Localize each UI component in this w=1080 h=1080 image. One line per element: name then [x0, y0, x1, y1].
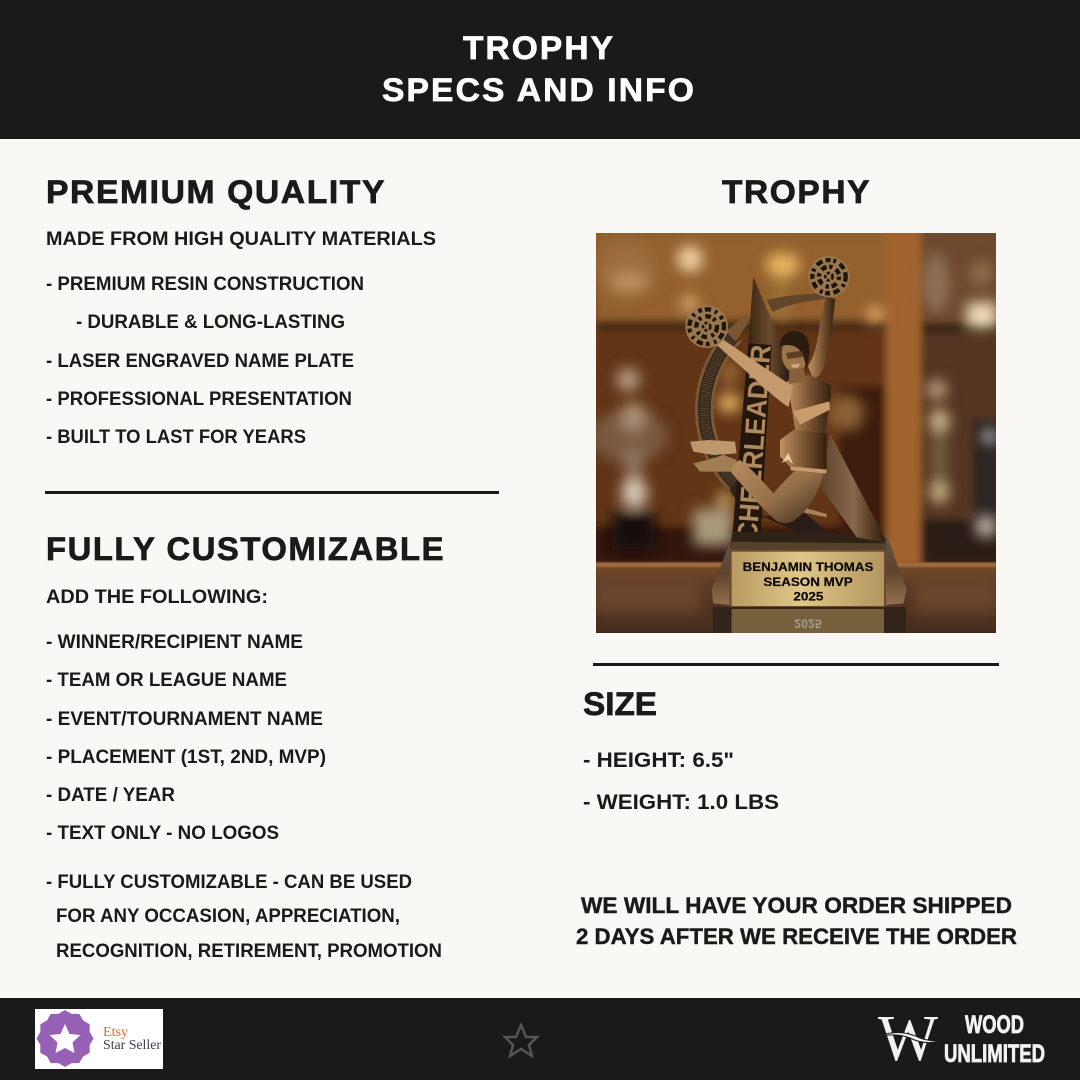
- badge text: [103, 1025, 161, 1053]
- shipping note: WE WILL HAVE YOUR ORDER SHIPPED: [581, 893, 1012, 918]
- torso: [787, 375, 831, 437]
- header band: [0, 0, 1080, 139]
- left arm: [717, 338, 793, 407]
- list: quality features: - PREMIUM RESIN CONSTRUCTION: [46, 273, 364, 295]
- footer band: [0, 998, 1080, 1080]
- heading: premium quality: PREMIUM QUALITY: [46, 174, 386, 210]
- arc ring: [704, 293, 835, 540]
- subheading: add the following: ADD THE FOLLOWING:: [46, 586, 268, 608]
- feet: [690, 440, 737, 455]
- heading: trophy: TROPHY: [722, 174, 871, 210]
- logo wordmark: [944, 1011, 1045, 1068]
- text block: occasions: RECOGNITION, RETIREMENT, PROMOTION: [56, 940, 442, 962]
- list: quality features: - DURABLE & LONG-LASTING: [76, 311, 345, 333]
- logo wordmark: WOOD: [965, 1011, 1024, 1039]
- pom pom right: [808, 256, 850, 297]
- logo mark: W: W: [878, 1002, 939, 1075]
- blurred background shelves and trophies: [596, 226, 1003, 566]
- heading: fully customizable: FULLY CUSTOMIZABLE: [46, 531, 445, 567]
- header title: TROPHY: [463, 30, 615, 66]
- list: customization options: [46, 631, 326, 844]
- text: weight: - WEIGHT: 1.0 LBS: [583, 791, 779, 814]
- trophy figure: [685, 256, 907, 607]
- legs: [727, 460, 823, 523]
- trophy photo: [596, 233, 996, 633]
- list: quality features: - BUILT TO LAST FOR YEARS: [46, 426, 306, 448]
- badge text: Etsy: [103, 1025, 128, 1040]
- icon: outline star: [505, 1025, 537, 1056]
- plate reflection: [713, 607, 906, 633]
- list: customization options: - EVENT/TOURNAMENT NAME: [46, 708, 323, 730]
- banner strip: [732, 343, 772, 543]
- icon: purple badge with star: [36, 1010, 94, 1067]
- list: customization options: - DATE / YEAR: [46, 784, 175, 806]
- list: quality features: - PROFESSIONAL PRESENTATION: [46, 388, 352, 410]
- name plate: 2025: [793, 590, 823, 604]
- name plate: BENJAMIN THOMAS: [743, 560, 873, 574]
- text block: occasions: - FULLY CUSTOMIZABLE - CAN BE USED: [46, 871, 412, 893]
- head: [780, 331, 809, 384]
- logo wordmark: UNLIMITED: [944, 1040, 1045, 1068]
- list: quality features: [46, 273, 364, 448]
- list: customization options: - PLACEMENT (1ST, 2ND, MVP): [46, 746, 326, 768]
- list: quality features: - LASER ENGRAVED NAME PLATE: [46, 350, 354, 372]
- panel: premium quality: [46, 174, 436, 448]
- plate reflection: 2025: [794, 616, 822, 630]
- list: customization options: - TEXT ONLY - NO LOGOS: [46, 822, 279, 844]
- pom pom left: [685, 305, 728, 348]
- badge text: Star Seller: [103, 1038, 161, 1053]
- subheading: materials: MADE FROM HIGH QUALITY MATERIALS: [46, 228, 436, 250]
- banner lettering: CHEERLEADER: [732, 344, 777, 542]
- header title: SPECS AND INFO: [382, 72, 696, 108]
- panel: size: [583, 686, 779, 814]
- header title: [382, 30, 696, 108]
- heading: size: SIZE: [583, 686, 657, 722]
- panel: fully customizable: [46, 531, 445, 962]
- cheerleader figure: [685, 256, 850, 523]
- wooden table: [596, 563, 996, 633]
- text block: occasions: FOR ANY OCCASION, APPRECIATION,: [56, 905, 400, 927]
- shipping note: 2 DAYS AFTER WE RECEIVE THE ORDER: [576, 924, 1017, 949]
- name plate: SEASON MVP: [763, 575, 853, 589]
- text: height: - HEIGHT: 6.5": [583, 749, 734, 772]
- base: [712, 531, 907, 607]
- star spike: [748, 277, 791, 390]
- list: customization options: - TEAM OR LEAGUE NAME: [46, 669, 287, 691]
- skirt: [780, 430, 827, 470]
- text block: occasions: [46, 871, 442, 962]
- right triangle: [820, 433, 887, 542]
- shipping note: [576, 893, 1017, 949]
- raised right arm: [808, 296, 835, 378]
- list: customization options: - WINNER/RECIPIENT NAME: [46, 631, 303, 653]
- name plate: [732, 552, 884, 606]
- wood unlimited logo: [878, 1002, 1045, 1075]
- etsy star seller badge: [35, 1009, 163, 1069]
